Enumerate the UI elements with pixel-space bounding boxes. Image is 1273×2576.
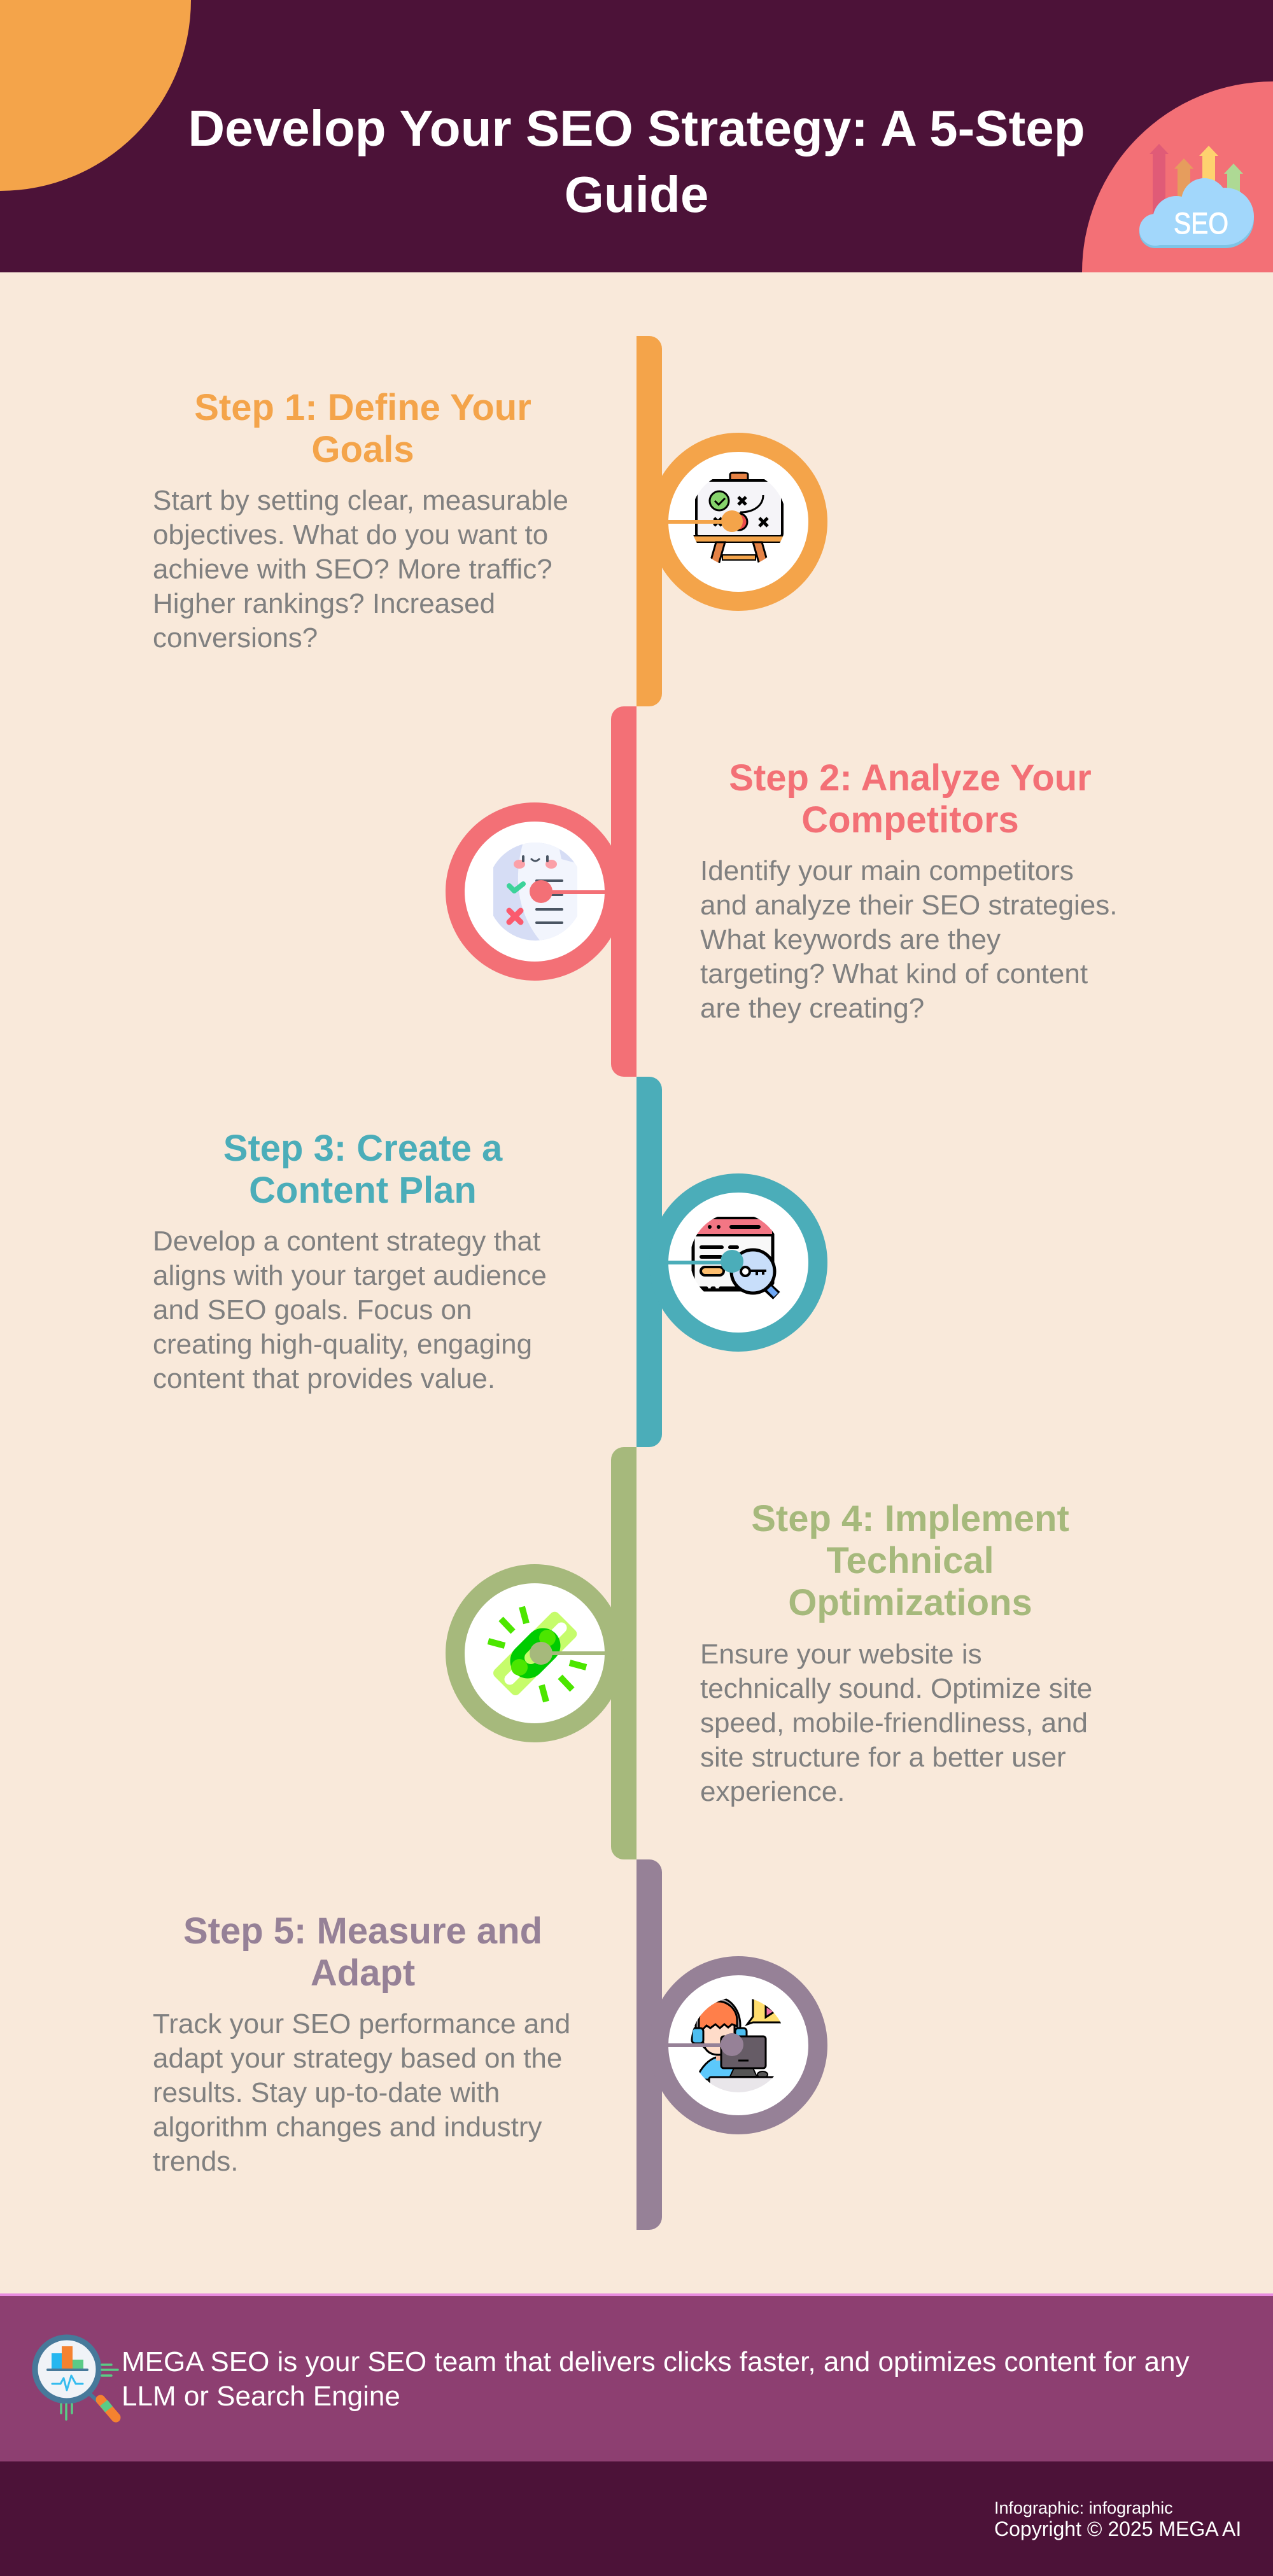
text: step 1: objectives. What do you want to [153, 519, 548, 550]
heading: step 3: Content Plan [249, 1170, 477, 1211]
header band [0, 0, 1273, 272]
text: step 2 [700, 855, 1117, 1024]
text: step 4: experience. [700, 1776, 845, 1807]
title: Guide [565, 166, 708, 223]
text: step 1 [153, 485, 568, 654]
icon: magnifier with chart [32, 2334, 121, 2422]
panel: step 2 [446, 706, 1117, 1077]
orange corner circle [0, 0, 191, 191]
icon: SEO cloud with arrows: SEO [1174, 206, 1228, 240]
text: step 4: site structure for a better user [700, 1742, 1066, 1773]
timeline bar 2 [611, 706, 636, 1077]
text: step 3: creating high-quality, engaging [153, 1329, 532, 1360]
timeline bar 5 [636, 1859, 662, 2230]
timeline bar 1 [636, 336, 662, 706]
copyright: Copyright © 2025 MEGA AI [994, 2517, 1241, 2540]
text: step 2: targeting? What kind of content [700, 958, 1088, 990]
heading: step 4: Technical [826, 1540, 994, 1581]
text: step 5: results. Stay up-to-date with [153, 2077, 500, 2108]
title: Develop Your SEO Strategy: A 5-Step [188, 100, 1085, 157]
heading: step 1: Goals [311, 429, 414, 470]
text: step 2: and analyze their SEO strategies. [700, 890, 1117, 921]
text: step 2: What keywords are they [700, 924, 1001, 955]
text: step 5: Track your SEO performance and [153, 2008, 570, 2040]
text: step 1: Start by setting clear, measurable [153, 485, 568, 516]
heading: step 4: Optimizations [788, 1582, 1032, 1623]
panel: step 5 [153, 1859, 827, 2230]
text: step 5: trends. [153, 2146, 239, 2177]
text: step 4: Ensure your website is [700, 1639, 982, 1670]
timeline bar 3 [636, 1077, 662, 1447]
text: step 3 [153, 1226, 547, 1394]
icon: person at monitor [662, 1956, 827, 2134]
heading: step 5: Adapt [311, 1952, 415, 1994]
icon: checklist document [446, 802, 611, 981]
panel: promo band [0, 2293, 1273, 2461]
icon: keyword research browser [662, 1173, 827, 1352]
text: step 4 [700, 1639, 1092, 1807]
text: step 3: aligns with your target audience [153, 1260, 547, 1291]
title [188, 100, 1085, 223]
heading: step 5 [183, 1910, 542, 1994]
heading: step 4 [751, 1498, 1069, 1623]
text: step 2: are they creating? [700, 993, 924, 1024]
heading: step 5: Step 5: Measure and [183, 1910, 542, 1952]
accent top border [0, 2293, 1273, 2296]
text: step 5: algorithm changes and industry [153, 2111, 542, 2143]
text: step 2: Identify your main competitors [700, 855, 1074, 886]
footer label: Infographic: infographic [994, 2498, 1173, 2517]
heading: step 2: Competitors [801, 799, 1019, 841]
text: step 4: technically sound. Optimize site [700, 1673, 1092, 1704]
text: step 3: content that provides value. [153, 1363, 495, 1394]
text: step 5 [153, 2008, 570, 2177]
text: step 5: adapt your strategy based on the [153, 2043, 562, 2074]
heading: step 1: Step 1: Define Your [194, 387, 531, 428]
promo text [122, 2346, 1190, 2412]
pink corner circle [1082, 81, 1273, 463]
heading: step 2 [729, 757, 1092, 841]
icon: SEO cloud with arrows [1139, 144, 1254, 248]
text: step 3: and SEO goals. Focus on [153, 1294, 472, 1326]
icon: strategy board [662, 433, 827, 611]
panel: step 3 [153, 1077, 827, 1447]
promo text: LLM or Search Engine [122, 2381, 400, 2412]
text: step 3: Develop a content strategy that [153, 1226, 540, 1257]
icon: bandage fix [446, 1564, 611, 1742]
promo text: MEGA SEO is your SEO team that delivers clicks faster, and optimizes content for any [122, 2346, 1190, 2377]
text: step 1: Higher rankings? Increased [153, 588, 495, 619]
heading: step 1 [194, 387, 531, 470]
panel: step 4 [446, 1447, 1092, 1859]
panel: footer band [0, 2461, 1273, 2576]
text: step 1: achieve with SEO? More traffic? [153, 554, 552, 585]
heading: step 3: Step 3: Create a [223, 1128, 502, 1169]
heading: step 2: Step 2: Analyze Your [729, 757, 1092, 799]
heading: step 4: Step 4: Implement [751, 1498, 1069, 1539]
heading: step 3 [223, 1128, 503, 1211]
text: step 1: conversions? [153, 622, 318, 654]
panel: step 1 [153, 336, 827, 706]
timeline bar 4 [611, 1447, 636, 1859]
text: step 4: speed, mobile-friendliness, and [700, 1707, 1088, 1739]
